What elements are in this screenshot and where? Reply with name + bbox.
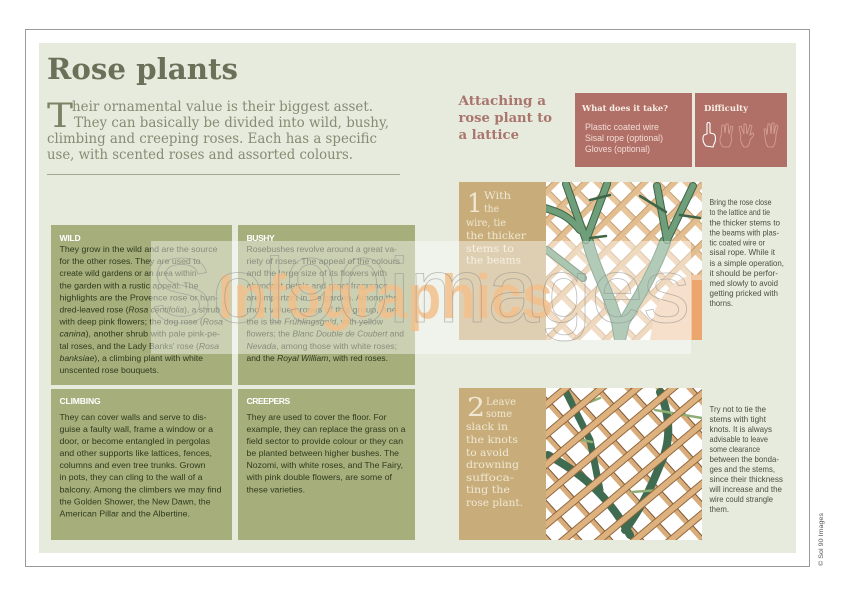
text: creepers: [245, 412, 406, 494]
text: climbing: and other supports like lattices, fences,: [60, 448, 212, 458]
lattice strips: [546, 182, 702, 340]
heading: climbing: CLIMBING: [60, 396, 101, 406]
step 2 text: the knots: [466, 434, 518, 446]
step 1 note: the beams with plas-: [710, 228, 779, 238]
text: climbing: columns and even tree trunks. Grown: [60, 460, 206, 470]
text: bushy: Nevada, among those with white roses;: [246, 341, 397, 351]
text: bushy: Rosebushes revolve around a great va-: [246, 244, 397, 254]
step 2 text: some: [486, 408, 512, 420]
panel: climbing: [51, 389, 232, 540]
text: wild: highlights are the Provence rose or hun-: [60, 292, 218, 302]
step 2 note: [709, 405, 783, 514]
materials list: [585, 122, 663, 154]
drop cap: T: [47, 96, 73, 136]
lower lattice strips: [546, 388, 702, 540]
background panel: [39, 43, 796, 553]
step 2 note: advisable to leave: [710, 435, 768, 444]
step 2 note: stems with tight: [710, 415, 767, 424]
text: wild: banksiae), a climbing plant with white: [60, 353, 203, 363]
step number 2: 2: [467, 393, 485, 423]
text: bushy: most valued roses of this group, one: [246, 304, 397, 314]
text: bushy: are important in the garden. Among the: [246, 292, 398, 302]
step 1 note: med slowly to avoid: [710, 279, 778, 288]
watermark: sol90images: Sol90images: [150, 240, 690, 342]
step 1 text: With: [484, 190, 511, 202]
icon: hand one finger, active: [703, 122, 716, 147]
step 2 text: drowning: [466, 459, 519, 471]
step 1 text: the beams: [466, 254, 521, 266]
panel: wild: [51, 225, 232, 385]
panel: difficulty: [695, 93, 787, 167]
icon: hand three fingers: [739, 124, 754, 147]
text: wild: for the other roses. They are used to: [60, 256, 201, 266]
text: climbing: guise a faulty wall, frame a window or a: [60, 424, 213, 434]
step 1 text: stems to: [466, 243, 514, 255]
step number 1: 1: [467, 189, 482, 219]
step 2 note: will increase and the: [709, 485, 782, 494]
text: climbing: They can cover walls and serve to dis-: [60, 412, 207, 422]
step 1 text: [466, 190, 527, 266]
step 2 note: ges and the stems,: [710, 465, 775, 474]
rose stems: [548, 388, 702, 535]
step 2 text: Leave: [486, 396, 516, 408]
step 2 text: suffoca-: [466, 472, 514, 484]
illustration: step 2 lattice and rose stems: [546, 388, 702, 540]
text: climbing: in pots, they can cling to the wall of a: [60, 472, 203, 482]
panel: creepers: [238, 389, 415, 540]
panel: bushy: [238, 225, 415, 385]
illustration: step 1 lattice and rose stems: [545, 182, 702, 340]
text: climbing: balcony. Among the climbers we may find: [60, 484, 222, 494]
step 2 note: some clearance: [710, 445, 760, 454]
intro text: heir ornamental value is their biggest asset.: [72, 99, 373, 115]
step 1 note: thorns.: [710, 299, 733, 308]
step 1 note: it should be perfor-: [710, 269, 778, 278]
step 1 text: the: [484, 203, 499, 215]
text: bushy: riety of roses. The appeal of the colours: [246, 256, 401, 266]
intro text: They can basically be divided into wild, bushy,: [74, 115, 389, 131]
step 1 note: is a simple operation,: [710, 259, 784, 268]
upper lattice strips: [546, 388, 702, 540]
step 2 note: Try not to tie the: [710, 405, 766, 414]
step 2 text: to avoid: [466, 447, 509, 459]
title: Rose plants: [47, 52, 238, 86]
icon: hand two fingers: [720, 124, 733, 147]
text: wild: canina), another shrub with pale pink-pe-: [60, 329, 220, 339]
credit: © Sol 90 Images: [817, 512, 825, 566]
text: bushy: abundant petals and great fragrance: [246, 280, 388, 290]
text: bushy: [246, 244, 404, 363]
heading: attaching a rose plant to a lattice: rose plant to: [458, 111, 552, 126]
step 2 note: wire could strangle: [709, 495, 773, 504]
step 1 note: tic coated wire or: [710, 238, 765, 248]
text: wild: create wild gardens or an area within: [60, 268, 197, 278]
rose stems: [545, 184, 700, 340]
step 2 text: [466, 396, 523, 509]
step 1 note: [710, 198, 784, 308]
step 2 text: rose plant.: [466, 497, 523, 509]
text: creepers: with pink double flowers, are some of: [245, 472, 393, 482]
text: wild: dred-leaved rose (Rosa centifolia), a shrub: [60, 304, 220, 314]
step 2 note: them.: [710, 505, 729, 514]
text: climbing: the Golden Shower, the New Dawn, the: [60, 496, 211, 506]
step 1 text: wire, tie: [466, 217, 506, 229]
hand: [650, 275, 702, 340]
step 2 text: ting the: [466, 484, 510, 496]
step 1 text: the thicker: [466, 230, 527, 242]
text: bushy: and the large size of its flowers with: [246, 268, 387, 278]
text: wild: unscented rose bouquets.: [60, 365, 159, 375]
text: creepers: field sector to provide colour or they can: [246, 436, 403, 446]
step 1 note: to the lattice and tie: [710, 208, 770, 217]
panel: step 1 caption: [459, 182, 546, 340]
step 2 note: knots. It is always: [710, 425, 772, 434]
text: wild: tal roses, and the Lady Banks' rose (Rosa: [60, 341, 219, 351]
heading: attaching a rose plant to a lattice: [457, 94, 552, 143]
text: creepers: example, they can replace the grass on a: [246, 424, 406, 434]
step 1 note: the thicker stems to: [710, 218, 780, 228]
intro text: climbing and creeping roses. Each has a specific: [47, 131, 377, 147]
heading: wild: WILD: [60, 233, 81, 243]
text: creepers: be planted between higher bushes. The: [246, 448, 399, 458]
heading: attaching a rose plant to a lattice: a lattice: [458, 128, 519, 143]
text: bushy: flowers; the Blanc Double de Coubert and: [246, 329, 404, 339]
intro text: use, with scented roses and assorted colours.: [47, 147, 353, 163]
step 1 note: getting pricked with: [710, 289, 778, 298]
watermark: infographics: Infographics: [218, 263, 553, 332]
heading: what does it take: What does it take?: [581, 103, 668, 113]
text: wild: the garden with a rustic appeal. The: [60, 280, 199, 290]
heading: creepers: CREEPERS: [246, 396, 290, 406]
text: creepers: these varieties.: [246, 484, 305, 494]
text: wild: with deep pink flowers; the dog rose (Rosa: [59, 317, 223, 327]
step 2 note: between the bonda-: [710, 455, 779, 464]
panel: what does it take: [575, 93, 692, 167]
icon: hand four fingers: [764, 123, 778, 147]
intro text: [47, 96, 389, 163]
text: bushy: and the Royal William, with red roses.: [246, 353, 388, 363]
text: wild: [59, 244, 223, 375]
text: climbing: [60, 412, 222, 518]
text: bushy: the is the Frühlingsgold, with yellow: [246, 317, 384, 327]
text: climbing: American Pillar and the Albertine.: [60, 508, 190, 518]
step 2 note: since their thickness: [710, 475, 783, 484]
heading: difficulty: Difficulty: [704, 103, 749, 113]
materials list: Plastic coated wire: [585, 122, 659, 132]
text: creepers: They are used to cover the floor. For: [246, 412, 387, 422]
step 1 note: sisal rope. While it: [710, 248, 776, 257]
text: wild: They grow in the wild and are the source: [60, 244, 218, 254]
materials list: Sisal rope (optional): [585, 133, 663, 143]
text: climbing: door, or become entangled in pergolas: [60, 436, 211, 446]
heading: attaching a rose plant to a lattice: Attaching a: [457, 94, 547, 109]
watermark: [150, 240, 691, 354]
panel: step 2 caption: [459, 388, 546, 540]
step 1 note: Bring the rose close: [710, 198, 772, 207]
step 2 text: slack in: [466, 421, 508, 433]
materials list: Gloves (optional): [585, 144, 650, 154]
text: creepers: Nozomi, with white roses, and The Fairy,: [246, 460, 403, 470]
heading: bushy: BUSHY: [246, 233, 275, 243]
